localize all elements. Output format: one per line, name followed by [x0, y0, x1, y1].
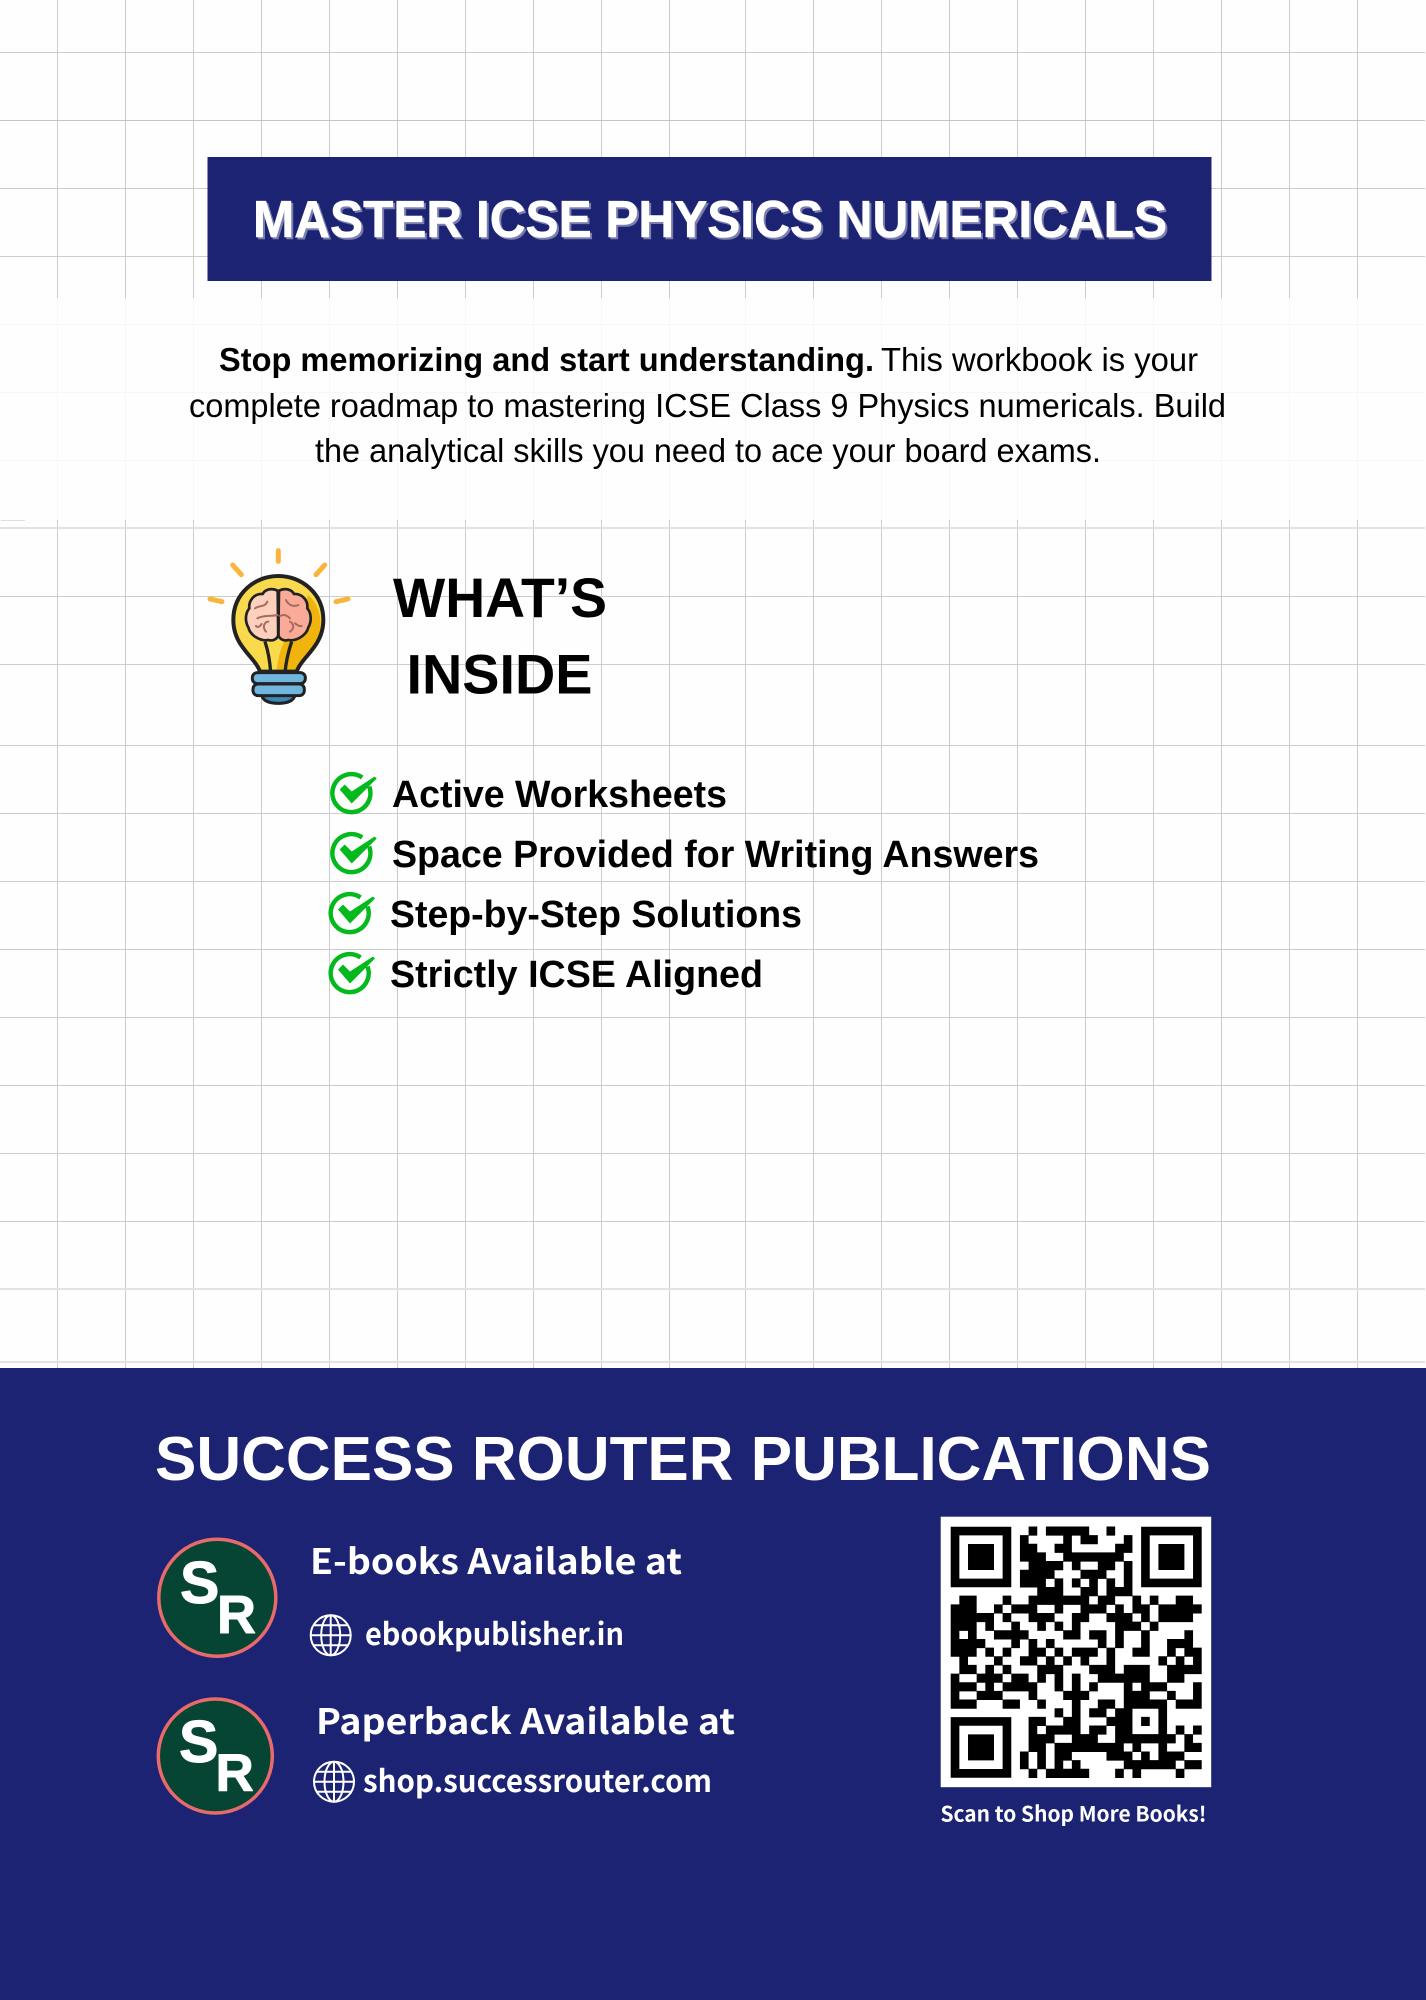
- logo: SR e-books: S: [180, 1550, 219, 1616]
- intro paragraph: [189, 341, 1226, 469]
- intro paragraph: This workbook is your: [881, 341, 1198, 378]
- link: ebookpublisher.in: ebookpublisher.in: [365, 1610, 624, 1654]
- icon: globe: [314, 1762, 354, 1802]
- intro paragraph: Stop memorizing and start understanding.: [219, 341, 874, 378]
- logo: SR paperback: S: [179, 1709, 218, 1775]
- item: active worksheets: Active Worksheets: [392, 774, 727, 816]
- logo: SR e-books: [159, 1539, 276, 1656]
- logo: SR paperback: [158, 1699, 272, 1813]
- text: e-books available: E-books Available at: [310, 1534, 682, 1585]
- heading: what's inside: [393, 566, 607, 706]
- intro paragraph: the analytical skills you need to ace your board exams.: [315, 432, 1101, 469]
- intro paragraph: complete roadmap to mastering ICSE Class 9 Physics numericals. Build: [189, 387, 1226, 424]
- checklist: [331, 774, 1039, 996]
- footer panel: [0, 1368, 1426, 2000]
- QR caption: Scan to Shop More Books!: [940, 1799, 1206, 1829]
- heading: what's inside: INSIDE: [406, 642, 592, 706]
- publisher heading: SUCCESS ROUTER PUBLICATIONS: [155, 1425, 1211, 1494]
- heading: what's inside: WHAT’S: [393, 566, 607, 629]
- item: space for answers: Space Provided for Writing Answers: [392, 834, 1039, 876]
- link: shop.successrouter.com: shop.successrouter.com: [363, 1757, 712, 1801]
- QR code: [941, 1517, 1211, 1787]
- item: step-by-step solutions: Step-by-Step Solutions: [390, 894, 802, 936]
- icon: light bulb with brain: [210, 551, 348, 703]
- item: strictly ICSE aligned: Strictly ICSE Aligned: [390, 954, 763, 996]
- text: paperback available: Paperback Available at: [316, 1694, 735, 1745]
- logo: SR e-books: R: [217, 1585, 256, 1645]
- title banner: [208, 157, 1212, 281]
- title text: MASTER ICSE PHYSICS NUMERICALS: [253, 191, 1167, 249]
- icon: globe: [311, 1615, 351, 1655]
- logo: SR paperback: R: [216, 1744, 254, 1803]
